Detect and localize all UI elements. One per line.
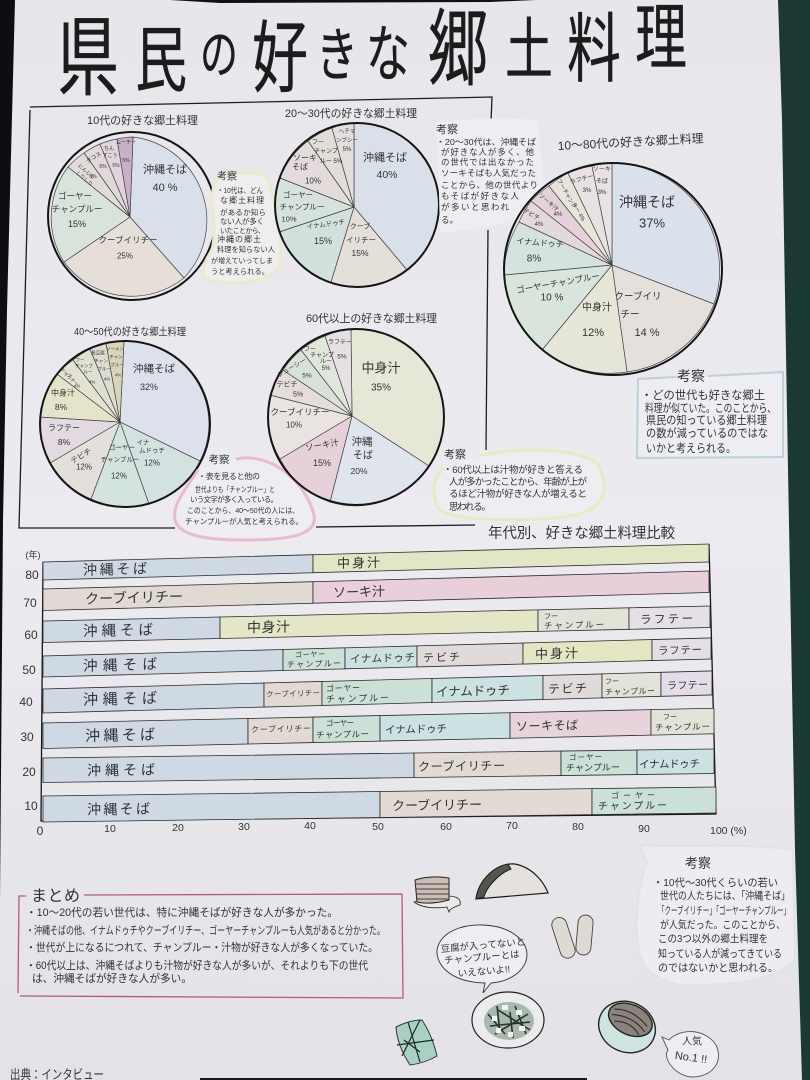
speech bubble: tofu: 豆腐が入ってないと — [440, 936, 526, 955]
panel: pie 40-50s — [40, 325, 314, 540]
pie chart: 20-30s: フー — [312, 139, 324, 146]
y axis labels: 60 — [24, 628, 38, 642]
bar: age 10: ゴーヤー — [611, 790, 655, 800]
bar: age 20: クーブイリチー — [418, 758, 505, 774]
bar: age 70: ソーキ汁 — [333, 584, 385, 600]
x axis labels: 10 — [104, 823, 116, 835]
pie chart: all ages: そば — [596, 177, 608, 185]
bar: age 80: 沖縄そば — [83, 560, 147, 578]
bar: age 60: チャンプルー — [544, 619, 604, 631]
y axis labels: 50 — [22, 663, 36, 677]
panel: pie 20-30s — [275, 106, 545, 287]
pie chart: 20-30s: ソーキ — [293, 154, 317, 162]
pie chart: 40-50s: 4% — [104, 376, 110, 382]
note: 60s+ pie: るほど汁物が好きな人が増えると — [449, 488, 587, 500]
bar: age 30: チャンプルー — [316, 729, 369, 740]
pie chart: 60s+: 35% — [371, 382, 391, 394]
panel: conclusion note: 考察 — [685, 856, 711, 870]
icon: taco — [476, 864, 548, 899]
speech bubble: number one: 人気 — [682, 1034, 702, 1048]
title: 郷 — [428, 4, 488, 97]
pie chart: 60s+: クーブイリチー — [270, 407, 330, 417]
bar: age 70: クーブイリチー — [85, 588, 183, 607]
bar: age 30: クーブイリチー — [251, 723, 311, 734]
pie chart: 20-30s: 10% — [305, 176, 321, 186]
bar: age 40: 沖縄そば — [83, 690, 157, 709]
icon: okinawa soba bowl — [590, 992, 664, 1062]
pie chart: all ages: 12% — [582, 327, 604, 339]
pie chart: all ages: 10 % — [541, 292, 564, 304]
bar: age 10 — [43, 787, 716, 822]
note: all ages pie: いかと考えられる。 — [646, 442, 736, 455]
bar: age 20: ゴーヤー — [569, 752, 602, 762]
pie chart: 60s+: 中身汁 — [361, 360, 401, 376]
bar: age 30: イナムドゥチ — [385, 723, 447, 736]
pie chart: 20-30s: ゴーヤー — [283, 190, 313, 200]
panel: conclusion note: ・10代〜30代くらいの若い — [653, 876, 778, 889]
note: 10s pie: があるか知ら — [220, 207, 266, 217]
panel: conclusion note: のではないかと思われる。 — [658, 962, 778, 974]
pie chart: all ages: イナムドゥチ — [516, 236, 564, 250]
bar: age 50: イナムドゥチ — [350, 652, 415, 666]
bar: age 50: テビチ — [423, 651, 460, 665]
pie chart: 40-50s: 8% — [55, 402, 68, 412]
pie chart: all ages: 3% — [583, 188, 592, 194]
pie chart: 40-50s: チャン — [109, 354, 123, 360]
pie chart: 40-50s: 中身汁 — [51, 388, 75, 398]
pie chart: 10s: 5% — [122, 158, 130, 164]
title: の — [200, 24, 238, 84]
pie chart: all ages: テビチ — [522, 206, 541, 222]
icon: chanpuru plate — [472, 992, 544, 1048]
summary text: ・60代以上は、沖縄そばよりも汁物が好きな人が多いが、それよりも下の世代 — [26, 958, 368, 972]
title: 土 — [505, 13, 553, 88]
pie chart: 40-50s: 4% — [89, 380, 95, 384]
pie chart: all ages: ラフテー — [569, 173, 594, 186]
pie chart: 10s: 40 % — [152, 182, 178, 194]
y axis labels: 70 — [23, 596, 37, 610]
pie chart: 60s+: ラフテー — [328, 339, 352, 346]
pie chart: all ages: 3% — [598, 190, 607, 196]
bar: age 50: ゴーヤー — [295, 649, 325, 659]
pie chart: 40-50s: 沖縄そば — [133, 362, 175, 375]
summary text: ・10〜20代の若い世代は、特に沖縄そばが好きな人が多かった。 — [26, 905, 338, 919]
pie chart: all ages: 沖縄そば — [619, 194, 675, 210]
note: 40-50s pie — [175, 454, 314, 540]
panel: conclusion note — [637, 845, 795, 985]
speech bubble: tofu: チャンプルーとは — [444, 949, 521, 967]
icon: tebichi sticks — [550, 914, 594, 960]
note: 10s pie — [203, 170, 281, 283]
pie chart: 40-50s: チャンプルー — [101, 456, 139, 464]
pie chart: all ages: フーチャンプ — [555, 178, 578, 210]
pie chart: 10s: 5% — [89, 174, 97, 180]
pie chart: 10s: すこう — [102, 153, 118, 159]
pie chart: 10s: クーブイリチー — [98, 235, 158, 245]
bar: age 30 — [43, 708, 714, 748]
x axis labels: 60 — [440, 821, 452, 833]
bar: age 10: クーブイリチー — [392, 797, 482, 813]
pie chart: 40-50s: チャンプ — [75, 364, 93, 370]
pie chart: 60s+: ジューシー — [276, 357, 308, 379]
title: き — [316, 23, 358, 88]
panel: pie all ages — [504, 131, 783, 458]
note: 10s pie: うと考えられる。 — [211, 267, 269, 276]
panel: conclusion note: この3つ以外の郷土料理を — [658, 932, 768, 945]
pie chart: 20-30s: 10% — [281, 214, 297, 224]
pie chart: 60s+: 5% — [337, 354, 347, 360]
title: 民 — [135, 21, 187, 102]
note: 40-50s pie: いう文字が多く入っている。 — [190, 494, 278, 504]
icon: wrapped package — [396, 1020, 437, 1065]
note: 10s pie: ない人が多く — [220, 216, 264, 226]
pie chart: 60s+: 5% — [302, 372, 312, 380]
note: 10s pie: 沖縄の郷土 — [217, 234, 261, 244]
heading: bar chart: 年代別、好きな郷土料理比較 — [488, 525, 676, 542]
x axis labels — [37, 820, 747, 838]
bar: age 60: 沖縄そば — [83, 622, 153, 640]
pie chart: 10s: チャンプルー — [52, 204, 102, 214]
pie chart: all ages: 4% — [535, 222, 544, 228]
pie chart: 40-50s: 8% — [58, 437, 71, 447]
summary text: ・世代が上になるにつれて、チャンプルー・汁物が好きな人が多くなっていた。 — [26, 940, 378, 954]
bar: age 10: 沖縄そば — [87, 801, 150, 817]
pie chart: 20-30s: クーブ — [350, 222, 370, 230]
note: all ages pie: ・どの世代も好きな郷土 — [641, 388, 765, 402]
bar: age 40: チャンプルー — [326, 693, 389, 704]
bar: age 30: 沖縄そば — [85, 727, 155, 745]
note: 20-30s pie: が多いと思われ — [441, 202, 509, 212]
pie chart: all ages: 37% — [639, 216, 665, 230]
bar: age 70 — [43, 571, 709, 610]
pie chart: 60s+: 20% — [350, 466, 368, 476]
summary text: ・沖縄そばの他、イナムドゥチやクーブイリチー、ゴーヤーチャンプルーも人気があると分かった。 — [26, 923, 385, 937]
bar: age 40: ゴーヤー — [326, 682, 360, 693]
pie chart: 40-50s: プルー — [97, 366, 111, 372]
note: 10s pie: な郷土料理 — [220, 195, 264, 205]
pie chart: 40-50s: 12% — [111, 472, 127, 480]
heading: 10s pie: 10代の好きな郷土料理 — [87, 113, 198, 127]
panel: stacked bar chart — [19, 525, 747, 838]
pie chart: 20-30s: イリチー — [346, 236, 376, 244]
speech bubble: tofu — [437, 925, 527, 993]
pie chart: 60s+: 5% — [293, 392, 303, 398]
pie chart: 10s: しりしり — [74, 170, 94, 188]
tape at top edge — [170, 0, 536, 3]
panel: conclusion note: が人気だった。このことから、 — [660, 918, 785, 931]
y axis labels — [19, 549, 40, 813]
pie chart: 60s+: ルー — [320, 359, 332, 365]
pie chart: 40-50s: 12% — [76, 462, 92, 472]
title: 県 — [57, 10, 119, 107]
pie chart: all ages: 14 % — [634, 327, 660, 339]
summary text — [26, 905, 385, 985]
note: all ages pie — [637, 368, 783, 458]
panel: pie 10s — [48, 113, 281, 300]
pie chart: all ages: ソーキ — [593, 167, 611, 173]
note: 20-30s pie: 考察 — [436, 123, 458, 136]
pie chart: 60s+: そば — [353, 450, 373, 462]
note: 60s+ pie — [434, 448, 604, 520]
note: 60s+ pie: 人が多かったことから、年齢が上が — [449, 476, 587, 488]
pie chart: 60s+: テビチ — [276, 380, 298, 388]
pie chart: 40-50s: ルー — [84, 370, 93, 374]
note: 20-30s pie: ソーキそばも人気だった — [441, 168, 536, 178]
pie chart: 40-50s: ゴーヤー — [109, 442, 135, 452]
title: な — [366, 22, 410, 89]
x axis labels: 40 — [304, 820, 316, 832]
pie chart: 20-30s: ンブシー — [336, 136, 358, 144]
pie chart: 10s: にんじん — [76, 163, 96, 181]
note: 40-50s pie: 考察 — [208, 454, 230, 466]
bar: age 20: イナムドゥチ — [639, 758, 700, 771]
pie chart: 40-50s: チャン — [94, 358, 108, 364]
pie chart: 40-50s: ラフテー — [48, 424, 80, 432]
axis and chart edge — [41, 544, 716, 821]
note: all ages pie: の数が減っているのではな — [646, 426, 768, 440]
x axis labels: 80 — [572, 821, 584, 833]
pie chart: 20-30s: ヘチマ — [339, 128, 356, 135]
title: 理 — [635, 0, 687, 79]
pie chart: 20-30s: 15% — [314, 236, 332, 246]
bar: age 40 — [43, 671, 712, 713]
note: 10s pie: が増えていってしま — [211, 256, 273, 265]
note: 10s pie: ・10代は、どん — [217, 185, 263, 195]
bar: age 50: ラフテー — [658, 644, 702, 657]
bar: age 60 — [43, 606, 710, 642]
bar: age 40: テビチ — [548, 681, 587, 696]
pie chart: 40-50s: 4% — [115, 372, 121, 378]
bar: age 30: チャンプルー — [655, 721, 710, 733]
panel: conclusion note: 知っている人が減ってきている — [658, 947, 782, 960]
x axis labels: 70 — [506, 820, 518, 832]
x axis labels: 100 (%) — [710, 825, 747, 837]
pie chart: all ages: ソーキ汁 — [537, 191, 560, 213]
bar: age 40: フー — [605, 677, 619, 686]
bar: age 40: チャンプルー — [605, 686, 655, 697]
pie chart: 20-30s: イナムドゥチ — [306, 218, 346, 231]
pie chart: 10s: ちん — [104, 146, 114, 152]
bar: age 20 — [43, 749, 714, 782]
heading: 40-50s pie: 40〜50代の好きな郷土料理 — [74, 325, 186, 338]
bar: age 60: フー — [544, 612, 558, 621]
panel: summary — [18, 888, 403, 998]
note: 40-50s pie: ・表を見ると他の — [198, 471, 260, 481]
bar: age 30: ソーキそば — [516, 718, 578, 734]
pie chart: 40-50s: イリチー — [62, 371, 80, 387]
note: 60s+ pie: 思われる。 — [449, 502, 491, 513]
speech bubble: number one — [662, 1032, 719, 1077]
heading: all ages pie: 10〜80代の好きな郷土料理 — [557, 131, 704, 153]
summary heading: まとめ — [31, 888, 80, 905]
note: 10s pie: 料理を知らない人 — [217, 245, 275, 254]
pie chart: 60s+: ソーキ汁 — [304, 437, 340, 453]
bar: age 40: ラフテー — [667, 679, 708, 692]
pie chart: 10s: 15% — [68, 219, 86, 229]
panel: pie 60s+ — [268, 311, 604, 520]
bar: age 80 — [43, 544, 709, 580]
pie chart: 40-50s: テビチ — [69, 446, 93, 466]
y axis labels: 80 — [25, 568, 39, 582]
x axis labels: 20 — [172, 822, 184, 834]
summary text: は、沖縄そばが好きな人が多い。 — [32, 971, 192, 985]
bar: age 50: 中身汁 — [535, 646, 578, 662]
pie chart: 40-50s: 12% — [144, 458, 160, 468]
pie chart: 60s+: 沖縄 — [352, 435, 373, 448]
pie chart: 40-50s: ムドゥチ — [139, 446, 165, 454]
pie chart: all ages: 8% — [527, 254, 541, 264]
note: 20-30s pie: ことから、他の世代より — [441, 180, 538, 190]
note: 20-30s pie: の世代では出なかった — [441, 157, 534, 167]
pie chart: all ages: 中身汁 — [582, 300, 612, 314]
bar: age 20: 沖縄そば — [87, 761, 155, 778]
heading: 60s+ pie: 60代以上の好きな郷土料理 — [306, 311, 437, 325]
bar: age 50: チャンプルー — [287, 659, 341, 669]
bar: age 80: 中身汁 — [337, 555, 380, 571]
pie chart: 40-50s: 島豆腐 — [91, 350, 105, 356]
pie chart: 20-30s: チャンプ — [314, 148, 338, 155]
note: 40-50s pie: 世代よりも「チャンプルー」と — [195, 484, 275, 494]
bar: age 60: ラフテー — [640, 613, 693, 627]
note: all ages pie: 県民の知っている郷土料理 — [646, 413, 767, 427]
y axis labels: 40 — [19, 695, 33, 709]
pie chart: 10s: ムーチー — [116, 140, 136, 146]
pie chart: 60s+: 15% — [313, 458, 331, 468]
title: 料 — [567, 8, 621, 92]
pie chart: 10s — [48, 132, 216, 300]
pie chart: 20-30s: 15% — [351, 248, 369, 258]
pie chart: 40-50s: イナ — [137, 438, 149, 446]
pie chart: 40-50s: 4% — [74, 384, 80, 388]
pie chart: 20-30s: そば — [292, 162, 308, 172]
tape at bottom edge — [200, 1078, 587, 1080]
note: 20-30s pie: が好きな人が多く、他 — [441, 147, 534, 157]
bar: age 10: チャンプルー — [598, 800, 667, 813]
y axis labels: 30 — [20, 730, 34, 744]
icon: rafute pork belly — [414, 877, 460, 912]
pie chart: 40-50s: クーブ — [59, 366, 74, 380]
y axis labels: 20 — [22, 765, 36, 779]
pie chart: all ages — [504, 163, 722, 375]
pie chart: 40-50s: ソーメン — [106, 346, 124, 352]
note: 40-50s pie: チャンプルーが人気と考えられる。 — [185, 516, 303, 526]
note: 10s pie: いたことから、 — [220, 227, 265, 235]
frame around the age-group pies — [19, 97, 492, 528]
title: 好 — [252, 15, 308, 103]
pie chart: 40-50s: フー — [76, 358, 85, 362]
pie chart: 20-30s: チャンプルー — [280, 202, 324, 212]
heading: 20-30s pie: 20〜30代の好きな郷土料理 — [285, 106, 417, 120]
bar: age 50 — [43, 638, 711, 677]
pie chart: 40-50s — [40, 341, 210, 507]
pie chart: all ages: チー — [620, 310, 640, 320]
pie chart: 40-50s: 32% — [140, 382, 158, 392]
pie chart: 20-30s: 40% — [376, 169, 398, 181]
note: 10s pie: 考察 — [217, 170, 237, 182]
x axis labels: 50 — [372, 821, 384, 833]
pie chart: 20-30s — [275, 123, 439, 287]
speech bubble: tofu: いえないよ!! — [457, 964, 511, 980]
bar: age 60: 中身汁 — [247, 618, 290, 635]
x axis labels: 90 — [638, 823, 650, 835]
bar: age 20: チャンプルー — [566, 762, 620, 773]
note: 60s+ pie: ・60代以上は汁物が好きと答える — [443, 464, 583, 476]
pie chart: 60s+: フー — [304, 346, 316, 353]
summary frame — [18, 894, 403, 998]
pie chart: 60s+ — [268, 329, 444, 506]
pie chart: 20-30s: 5% — [343, 147, 352, 153]
pie chart: all ages: 4% — [554, 212, 563, 218]
speech bubble: number one: No.1 !! — [674, 1050, 708, 1066]
pie chart: 10s: ゴーヤー — [58, 191, 92, 201]
pie chart: all ages: ゴーヤーチャンプルー — [515, 271, 601, 295]
note: 20-30s pie: る。 — [441, 215, 458, 225]
pie chart: 20-30s: ルー 5% — [320, 159, 343, 165]
bar: age 30: ゴーヤー — [326, 717, 354, 728]
pie chart: 60s+: 10% — [286, 420, 302, 430]
pie chart: 10s: 25% — [117, 252, 133, 260]
pie chart: 60s+: 5% — [322, 366, 331, 372]
bar: age 40: クーブイリチー — [266, 688, 320, 699]
bar: age 40: イナムドゥチ — [436, 683, 510, 699]
note: all ages pie: 考察 — [677, 368, 705, 384]
pie chart: all ages: クーブイリ — [615, 290, 661, 302]
pie chart: 10s: 5% — [112, 163, 120, 169]
x axis labels: 0 — [37, 824, 44, 838]
pie chart: 10s: 5% — [99, 164, 107, 170]
y axis labels: 10 — [24, 799, 38, 813]
bar: age 50: 沖縄そば — [83, 656, 157, 675]
pie chart: 40-50s: プルー — [110, 362, 124, 368]
pie chart: all ages: ルー 4% — [570, 202, 586, 222]
pie chart: 10s: 沖縄そば — [143, 163, 187, 176]
pie chart: 10s: タコス — [84, 150, 103, 165]
panel: conclusion note: 世代の人たちには、「沖縄そば」 — [660, 889, 790, 902]
y axis labels: (年) — [26, 549, 40, 560]
note: 20-30s pie — [436, 118, 545, 232]
pie chart: 60s+: チャンプ — [310, 352, 334, 359]
note: 20-30s pie: ・20〜30代は、沖縄そば — [436, 137, 537, 147]
bar: age 30: フー — [663, 713, 677, 721]
note: 40-50s pie: このことから、40〜50代の人には、 — [187, 505, 299, 515]
note: 60s+ pie: 考察 — [444, 448, 466, 461]
pie chart: 20-30s: 沖縄そば — [363, 151, 407, 164]
note: 20-30s pie: もそばが好きな人 — [441, 191, 519, 201]
x axis labels: 30 — [238, 821, 250, 833]
